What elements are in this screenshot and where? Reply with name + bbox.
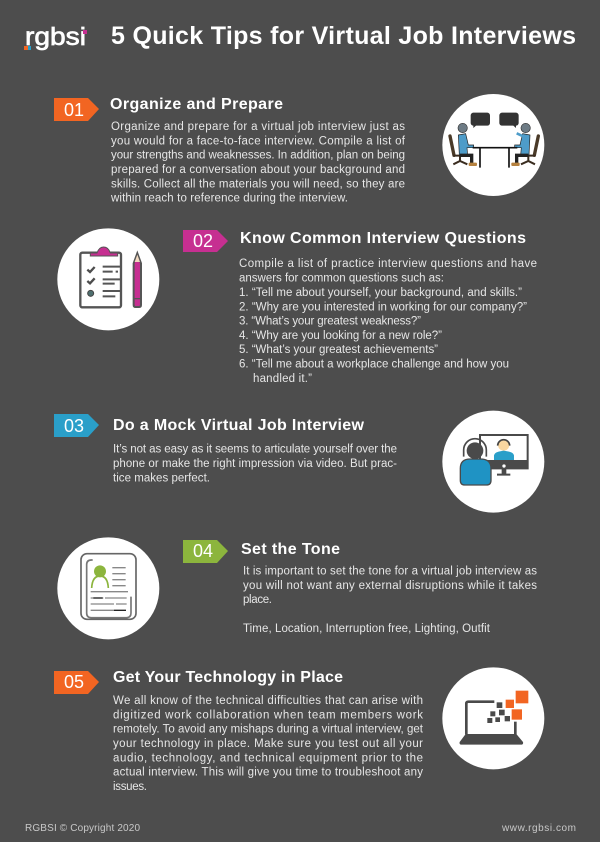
body text 1: your strengths and weaknesses. In addition, plan on being (111, 150, 405, 162)
body text 4 (243, 566, 537, 635)
badge 03: 03 (64, 416, 84, 436)
body text 5: remotely. To avoid any mishaps during a virtual interview, get (113, 724, 424, 736)
logo: rgbsi: rgbsi (25, 23, 86, 51)
body text 4: place. (243, 594, 272, 606)
body text 5: audio, technology, and technical equipment prior to the (113, 752, 423, 764)
body text 2: 6. “Tell me about a workplace challenge and how you (239, 359, 509, 371)
body text 5: your technology in place. Make sure you test out all your (113, 738, 423, 750)
icon: clipboard and pencil (57, 228, 159, 330)
panel: tip 5 get your technology in place (54, 667, 544, 793)
badge 02: 02 (193, 231, 213, 251)
badge 05 (54, 671, 99, 694)
body text 4: you will not want any external disruptions while it takes (243, 580, 537, 592)
body text 4: Time, Location, Interruption free, Lighting, Outfit (243, 623, 491, 635)
body text 2 (239, 258, 537, 385)
badge 03 (54, 414, 99, 437)
badge 05: 05 (64, 672, 84, 692)
body text 1: Organize and prepare for a virtual job interview just as (111, 121, 405, 133)
panel: tip 1 organize and prepare (54, 94, 544, 205)
panel: tip 3 mock virtual job interview (54, 411, 544, 513)
body text 2: 1. “Tell me about yourself, your background, and skills.” (239, 287, 522, 299)
icon: laptop with pixels (442, 667, 544, 769)
body text 2: 4. “Why are you looking for a new role?” (239, 330, 442, 342)
heading 1: Organize and Prepare (110, 96, 283, 113)
heading 3: Do a Mock Virtual Job Interview (113, 417, 365, 434)
footer website: www.rgbsi.com (501, 823, 576, 834)
body text 2: Compile a list of practice interview questions and have (239, 258, 537, 270)
body text 2: 3. “What’s your greatest weakness?” (239, 316, 421, 328)
body text 4: It is important to set the tone for a virtual job interview as (243, 566, 537, 578)
icon: video call (442, 411, 544, 513)
heading 5: Get Your Technology in Place (113, 669, 343, 686)
badge 04 (183, 540, 228, 563)
body text 3: tice makes perfect. (113, 472, 210, 484)
body text 1: within reach to reference during the interview. (110, 193, 348, 205)
footer copyright: RGBSI © Copyright 2020 (25, 823, 140, 834)
body text 2: 2. “Why are you interested in working for our company?” (239, 301, 527, 313)
heading 2: Know Common Interview Questions (240, 230, 526, 247)
heading 4: Set the Tone (241, 541, 340, 558)
body text 3: It’s not as easy as it seems to articulate yourself over the (113, 444, 397, 456)
body text 1: prepared for a conversation about your background and (111, 164, 405, 176)
icon: resume document (57, 537, 159, 639)
body text 3 (113, 444, 397, 484)
body text 1: you would for a face-to-face interview. Compile a list of (111, 135, 406, 147)
body text 3: phone or make the right impression via video. But prac- (113, 458, 397, 470)
body text 2: handled it.” (253, 373, 312, 385)
panel: tip 2 know common interview questions (57, 228, 537, 385)
badge 01: 01 (64, 100, 84, 120)
title: 5 Quick Tips for Virtual Job Interviews (111, 22, 576, 50)
body text 2: 5. “What’s your greatest achievements” (239, 344, 438, 356)
body text 5: digitized work collaboration when team members work (113, 709, 423, 721)
body text 1: skills. Collect all the materials you will need, so they are (111, 178, 405, 190)
body text 5 (113, 695, 424, 793)
body text 5: actual interview. This will give you time to troubleshoot any (113, 767, 423, 779)
body text 5: issues. (113, 781, 147, 793)
badge 04: 04 (193, 541, 213, 561)
badge 02 (183, 230, 228, 252)
body text 5: We all know of the technical difficulties that can arise with (113, 695, 423, 707)
icon: two people at interview table (442, 94, 544, 196)
badge 01 (54, 98, 99, 121)
body text 2: answers for common questions such as: (239, 272, 444, 284)
body text 1 (110, 121, 406, 205)
panel: tip 4 set the tone (57, 537, 537, 639)
